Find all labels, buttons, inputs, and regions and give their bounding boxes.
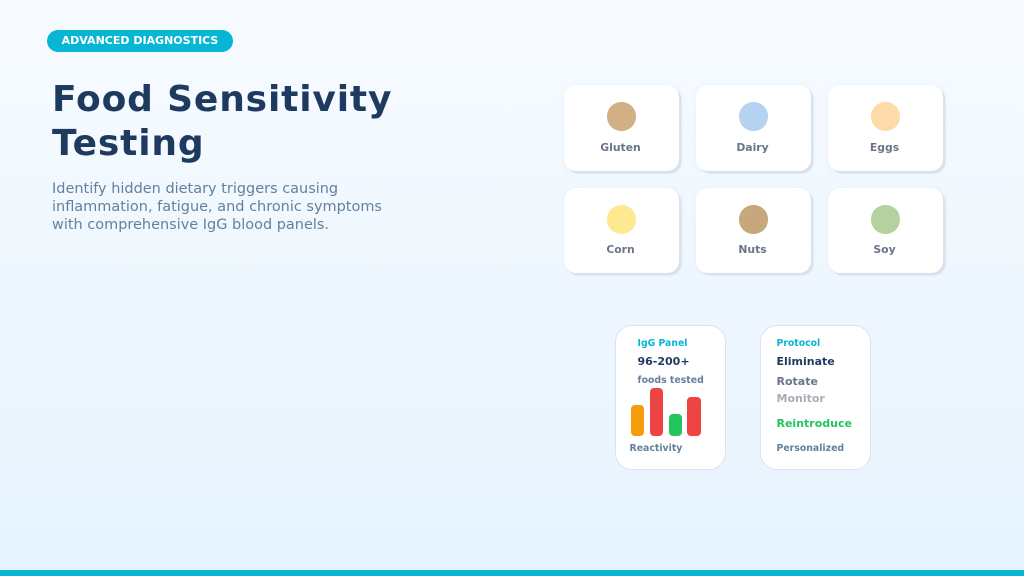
panel: food card dairy — [696, 85, 811, 171]
label: nuts: Nuts — [738, 243, 767, 256]
panel: food card gluten — [564, 85, 679, 171]
panel: food card nuts — [696, 188, 811, 273]
bar: orange — [631, 405, 644, 436]
label: soy: Soy — [873, 243, 896, 256]
title — [52, 79, 392, 164]
icon: gluten circle — [607, 102, 636, 130]
badge: advanced diagnostics: ADVANCED DIAGNOSTICS — [62, 34, 218, 47]
stat: 96-200+: 96-200+ — [638, 355, 690, 368]
title line 1: Food Sensitivity — [52, 79, 392, 120]
label: corn: Corn — [606, 243, 635, 256]
panel: food card corn — [564, 188, 679, 273]
step: reintroduce: Reintroduce — [776, 417, 852, 430]
subtitle text: with comprehensive IgG blood panels. — [52, 216, 329, 232]
heading: IgG Panel: IgG Panel — [638, 338, 687, 348]
heading: protocol: Protocol — [776, 338, 820, 348]
caption: foods tested: foods tested — [638, 374, 704, 386]
panel: IgG panel — [615, 325, 726, 470]
title line 2: Testing — [52, 123, 205, 164]
label: eggs: Eggs — [870, 141, 899, 154]
icon: dairy circle — [739, 102, 768, 130]
icon: nuts circle — [739, 205, 768, 234]
panel: food card eggs — [828, 85, 943, 171]
footer bar — [0, 570, 1024, 576]
label: dairy: Dairy — [736, 141, 769, 154]
label: gluten: Gluten — [600, 141, 641, 154]
badge: advanced diagnostics — [47, 30, 233, 52]
subtitle text: Identify hidden dietary triggers causing — [52, 180, 338, 196]
icon: soy circle — [871, 205, 900, 234]
bar: red tall — [650, 388, 663, 436]
subtitle text — [52, 180, 382, 232]
bar chart: reactivity — [631, 388, 701, 436]
step: monitor: Monitor — [776, 392, 825, 405]
step: rotate: Rotate — [776, 375, 818, 388]
icon: corn circle — [607, 205, 636, 234]
bar: green — [669, 414, 682, 436]
icon: eggs circle — [871, 102, 900, 130]
panel: food card soy — [828, 188, 943, 273]
step: eliminate: Eliminate — [776, 355, 835, 368]
subtitle text: inflammation, fatigue, and chronic symptoms — [52, 198, 382, 214]
caption: reactivity: Reactivity — [630, 442, 682, 454]
panel: protocol — [760, 325, 871, 470]
caption: personalized: Personalized — [776, 442, 844, 454]
bar: red — [687, 397, 700, 436]
